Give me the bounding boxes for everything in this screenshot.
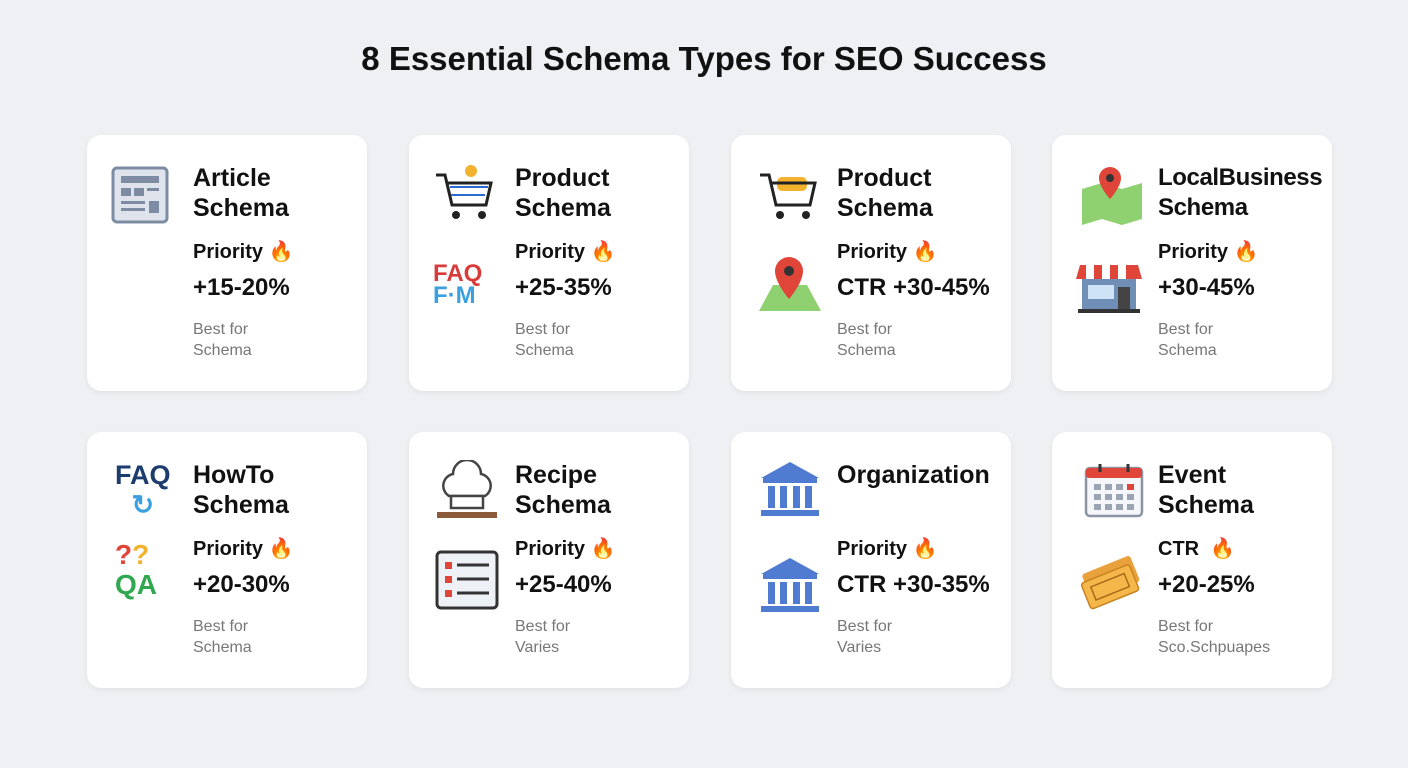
- card: Product Schema 1: [409, 135, 689, 391]
- value: +25-35%: [515, 274, 612, 301]
- icon: QA: ??: [115, 539, 149, 570]
- best for: Schema: [193, 342, 252, 359]
- heading: LocalBusiness: [1158, 164, 1322, 191]
- best for: Best for: [193, 618, 248, 635]
- heading: Product: [837, 164, 931, 192]
- best for: Best for: [837, 321, 892, 338]
- card: Recipe Schema: [409, 432, 689, 688]
- card: LocalBusiness Schema: [1052, 135, 1332, 391]
- heading: Article: [193, 164, 271, 192]
- value: +25-40%: [515, 571, 612, 598]
- heading: [1158, 461, 1254, 519]
- best for: [1158, 618, 1270, 656]
- icon: calendar: [1084, 464, 1144, 518]
- heading: Schema: [193, 491, 289, 519]
- title: 8 Essential Schema Types for SEO Success: [361, 40, 1047, 77]
- icon: tickets: [1080, 556, 1140, 610]
- value: +20-30%: [193, 571, 290, 598]
- icon: QA: QA: [115, 569, 157, 600]
- icon: store: [1076, 265, 1142, 313]
- best for: Best for: [515, 618, 570, 635]
- heading: Schema: [193, 194, 289, 222]
- icon: FAQ: F·M: [433, 282, 476, 309]
- best for: [193, 618, 252, 656]
- best for: [515, 618, 570, 656]
- card: Article Schema: [87, 135, 367, 391]
- best for: Sco.Schpuapes: [1158, 639, 1270, 656]
- heading: Product: [515, 164, 609, 192]
- icon: FAQ: FAQ: [115, 460, 171, 490]
- best for: Best for: [515, 321, 570, 338]
- heading: Schema: [1158, 491, 1254, 519]
- heading: [193, 164, 290, 222]
- heading: [515, 461, 612, 519]
- best for: Best for: [837, 618, 892, 635]
- best for: Schema: [1158, 342, 1217, 359]
- best for: Best for: [1158, 321, 1213, 338]
- best for: [193, 321, 252, 359]
- priority: Priority 🔥: [515, 241, 615, 263]
- value: +15-20%: [193, 274, 290, 301]
- icon: FAQ: FAQ: [433, 260, 482, 287]
- best for: Best for: [1158, 618, 1213, 635]
- priority: Priority 🔥: [193, 241, 293, 263]
- icon: FAQ: ↻: [131, 490, 154, 520]
- icon: building: [761, 462, 819, 516]
- best for: Schema: [515, 342, 574, 359]
- best for: [837, 618, 892, 656]
- best for: Schema: [193, 639, 252, 656]
- card: Event Schema: [1052, 432, 1332, 688]
- card: Product Schema 2: [731, 135, 1011, 391]
- heading: Schema: [837, 194, 933, 222]
- icon: cart: [436, 165, 493, 219]
- best for: Best for: [193, 321, 248, 338]
- card: Organization: [731, 432, 1011, 688]
- priority: CTR 🔥: [1158, 538, 1235, 560]
- best for: Varies: [515, 639, 559, 656]
- best for: [837, 321, 896, 359]
- priority: Priority 🔥: [515, 538, 615, 560]
- heading: [1158, 164, 1322, 221]
- value: CTR +30-35%: [837, 571, 990, 598]
- icon: checklist: [436, 550, 498, 610]
- heading: Schema: [515, 491, 611, 519]
- best for: [1158, 321, 1217, 359]
- best for: [515, 321, 574, 359]
- icon: map: [1082, 167, 1142, 225]
- priority: Priority 🔥: [1158, 241, 1258, 263]
- icon: map pin: [759, 257, 821, 311]
- heading: Event: [1158, 461, 1226, 489]
- heading: [837, 164, 934, 222]
- heading: Schema: [515, 194, 611, 222]
- value: +20-25%: [1158, 571, 1255, 598]
- heading: [193, 461, 290, 519]
- icon: newspaper: [112, 166, 168, 224]
- best for: Varies: [837, 639, 881, 656]
- heading: Organization: [837, 461, 990, 489]
- heading: Schema: [1158, 194, 1248, 221]
- priority: Priority 🔥: [837, 538, 937, 560]
- icon: building 2: [761, 558, 819, 612]
- value: +30-45%: [1158, 274, 1255, 301]
- priority: Priority 🔥: [837, 241, 937, 263]
- icon: FAQ: [433, 260, 482, 309]
- icon: chef hat: [437, 460, 497, 518]
- icon: FAQ: [115, 460, 171, 520]
- card: HowTo Schema: [87, 432, 367, 688]
- value: CTR +30-45%: [837, 274, 990, 301]
- heading: Recipe: [515, 461, 597, 489]
- heading: [515, 164, 612, 222]
- priority: Priority 🔥: [193, 538, 293, 560]
- heading: HowTo: [193, 461, 274, 489]
- best for: Schema: [837, 342, 896, 359]
- icon: QA: [115, 539, 157, 600]
- icon: cart: [760, 174, 817, 219]
